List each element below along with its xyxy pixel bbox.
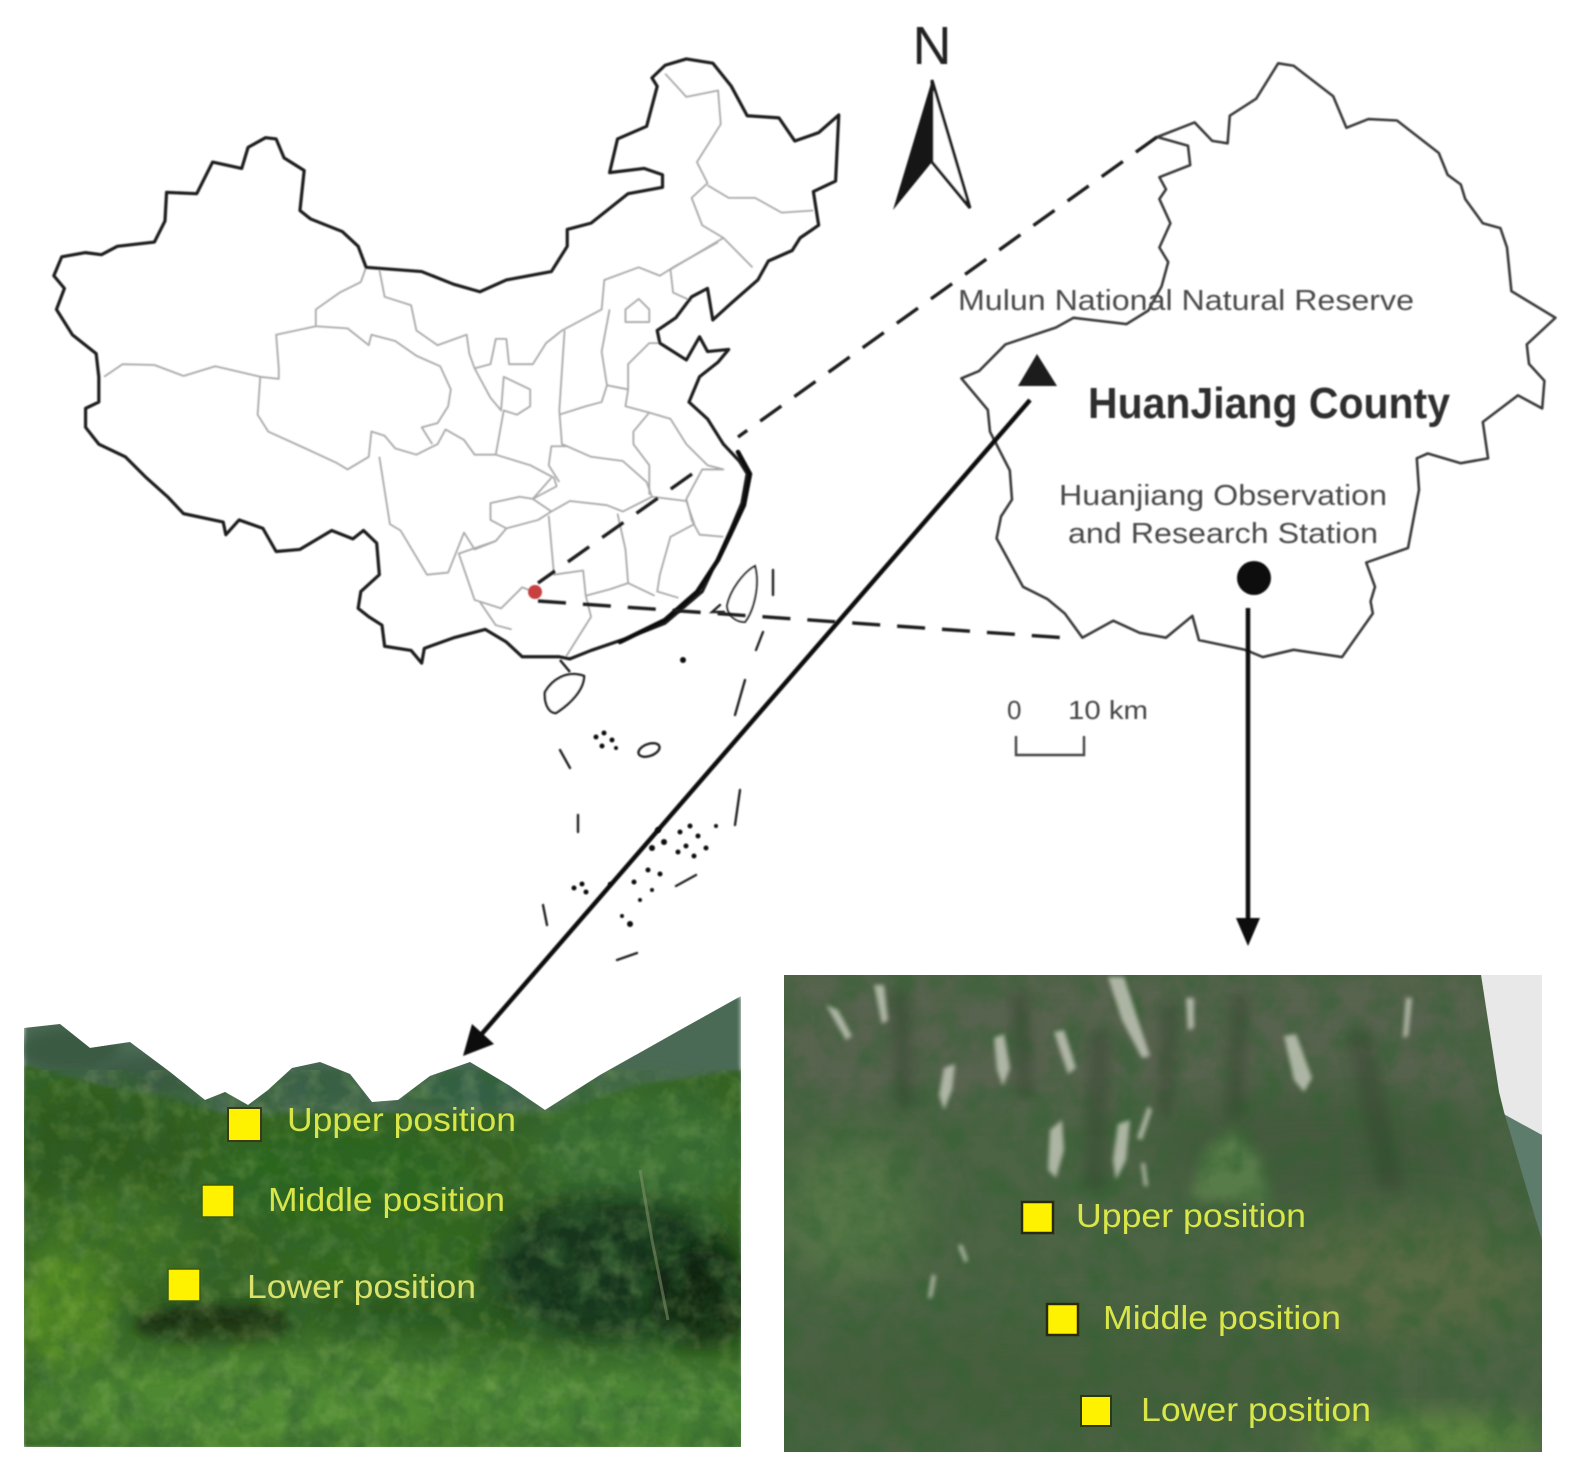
dashed connector lower xyxy=(538,601,1067,638)
label: observation station: and Research Station xyxy=(1068,518,1378,550)
province boundaries xyxy=(104,74,813,659)
arrow: reserve to left photo xyxy=(463,400,1030,1056)
lower position marker: Lower position xyxy=(1141,1391,1371,1428)
sky patch xyxy=(1481,975,1542,1135)
county boundary xyxy=(961,63,1555,657)
icon: Hainan island xyxy=(545,660,584,713)
photo: right site cliff xyxy=(780,975,1550,1460)
cliff face and slope xyxy=(780,975,1550,1460)
icon: station dot xyxy=(1237,561,1271,595)
north arrow xyxy=(893,16,970,210)
scale bar: 10 km xyxy=(1068,695,1148,725)
label: observation station xyxy=(1059,480,1387,550)
map of China xyxy=(54,59,839,960)
upper position marker: Upper position xyxy=(1076,1197,1306,1234)
coastal detail xyxy=(620,452,750,642)
foliage mass xyxy=(24,1065,741,1447)
middle position marker: Middle position xyxy=(268,1181,505,1218)
limestone streaks xyxy=(826,977,1412,1298)
label: county name: HuanJiang County xyxy=(1088,379,1450,428)
label: observation station: Huanjiang Observation xyxy=(1059,480,1387,512)
upper position marker: Upper position xyxy=(287,1101,516,1138)
distant karst peaks and forest xyxy=(24,996,741,1447)
icon: Taiwan island xyxy=(727,566,757,622)
scale bar xyxy=(1007,695,1148,755)
scale bar: 0 xyxy=(1007,695,1021,725)
arrow head xyxy=(893,80,970,210)
upper position marker xyxy=(227,1107,514,1142)
dark rock fissures xyxy=(900,1000,1390,1180)
HuanJiang County map xyxy=(538,63,1555,755)
national border outline xyxy=(54,59,839,663)
letter N: N xyxy=(912,16,952,76)
arrow: station to right photo xyxy=(1236,608,1260,946)
dashed connector upper xyxy=(538,137,1157,583)
lower position marker xyxy=(168,1268,476,1305)
lower position marker: Lower position xyxy=(247,1268,476,1305)
icon: reserve triangle xyxy=(1018,354,1057,386)
label: Mulun reserve: Mulun National Natural Reserve xyxy=(958,285,1414,317)
South China Sea dashes and islets xyxy=(543,570,773,960)
distant ridge xyxy=(1504,1114,1542,1240)
middle position marker: Middle position xyxy=(1103,1299,1341,1336)
red study location marker xyxy=(528,585,542,599)
photo: left site forest xyxy=(24,996,741,1447)
lower position marker xyxy=(1080,1395,1369,1428)
